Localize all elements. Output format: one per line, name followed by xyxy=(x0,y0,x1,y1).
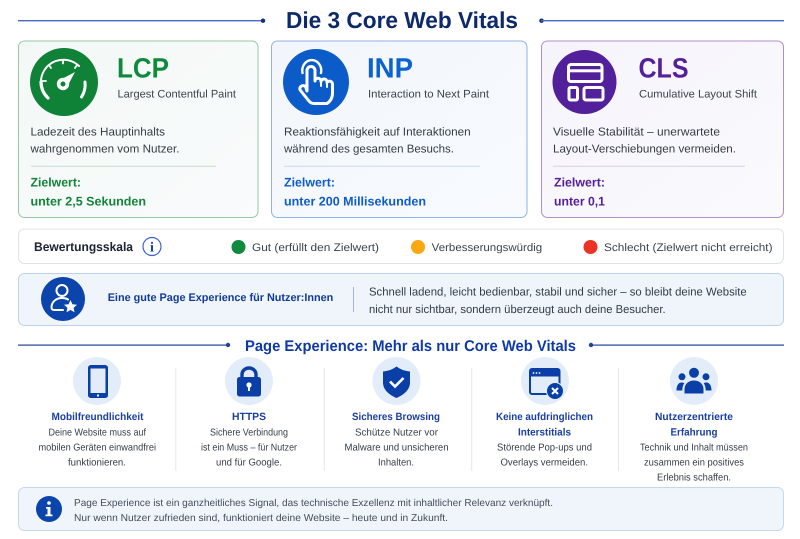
description: während des gesamten Besuchs. xyxy=(283,144,454,156)
target value: unter 0,1 xyxy=(554,194,605,208)
feature text: Schütze Nutzer vor xyxy=(355,428,439,438)
footer text: Page Experience ist ein ganzheitliches Signal, das technische Exzellenz mit inhaltlicher Relevanz verknüpft. xyxy=(74,498,553,509)
metric subtitle: Interaction to Next Paint xyxy=(368,88,489,100)
panel: CLS xyxy=(542,41,784,218)
section heading xyxy=(18,338,784,355)
banner text xyxy=(369,286,747,316)
legend: needs improvement xyxy=(411,240,542,254)
icon: smartphone xyxy=(73,357,121,405)
feature heading: Erfahrung xyxy=(670,426,718,438)
footer text xyxy=(74,498,553,524)
description: Ladezeit des Hauptinhalts xyxy=(30,126,165,138)
panel: page experience banner xyxy=(18,274,784,326)
panel: INP xyxy=(272,41,527,218)
title xyxy=(18,7,784,33)
description xyxy=(29,126,180,156)
footer text: Nur wenn Nutzer zufrieden sind, funktioniert deine Website – heute und in Zukunft. xyxy=(74,513,448,524)
target value xyxy=(284,176,426,208)
feature heading xyxy=(496,411,593,438)
target value xyxy=(30,176,146,208)
metric subtitle: Largest Contentful Paint xyxy=(118,88,236,100)
icon: info xyxy=(143,238,161,256)
banner text: Schnell ladend, leicht bedienbar, stabil und sicher – so bleibt deine Website xyxy=(369,286,747,298)
feature: HTTPS xyxy=(201,357,298,468)
feature text: und für Google. xyxy=(216,458,282,468)
description xyxy=(283,126,471,156)
target value: unter 200 Millisekunden xyxy=(284,194,426,208)
feature text: Deine Website muss auf xyxy=(48,428,146,438)
icon: people xyxy=(670,357,718,405)
feature text: Erlebnis schaffen. xyxy=(657,472,731,484)
feature heading: HTTPS xyxy=(232,411,266,423)
icon: gauge xyxy=(30,48,98,116)
feature heading: Nutzerzentrierte xyxy=(655,411,733,423)
feature text xyxy=(38,428,156,468)
feature heading xyxy=(655,411,733,438)
icon: padlock xyxy=(225,357,273,405)
feature heading: Interstitials xyxy=(518,426,571,438)
metric subtitle: Cumulative Layout Shift xyxy=(639,88,757,100)
icon: info xyxy=(36,496,62,522)
icon: shield xyxy=(372,357,420,405)
target value: Zielwert: xyxy=(30,176,81,190)
target value: Zielwert: xyxy=(284,176,335,190)
metric name: INP: INP xyxy=(367,52,413,84)
target value: Zielwert: xyxy=(554,176,605,190)
title: Die 3 Core Web Vitals xyxy=(286,7,518,33)
feature heading: Keine aufdringlichen xyxy=(496,411,593,423)
feature heading: Sicheres Browsing xyxy=(352,411,440,423)
icon: info: i xyxy=(150,240,154,256)
feature text: ist ein Muss – für Nutzer xyxy=(201,442,298,454)
icon: touch hand xyxy=(283,49,349,115)
banner heading: Eine gute Page Experience für Nutzer:Innen xyxy=(108,292,334,304)
description xyxy=(553,126,736,156)
feature text xyxy=(640,442,748,484)
panel: footer note xyxy=(18,488,784,530)
description: Visuelle Stabilität – unerwartete xyxy=(553,126,720,138)
description: wahrgenommen vom Nutzer. xyxy=(29,144,180,156)
feature text: Sichere Verbindung xyxy=(210,428,288,438)
legend: good: Gut (erfüllt den Zielwert) xyxy=(252,242,379,254)
section heading: Page Experience: Mehr als nur Core Web Vitals xyxy=(245,338,576,355)
feature text: funktionieren. xyxy=(68,458,126,468)
feature text: Overlays vermeiden. xyxy=(500,458,588,468)
feature text xyxy=(497,442,592,468)
feature heading: Mobilfreundlichkeit xyxy=(52,411,144,423)
feature: mobile friendliness xyxy=(38,357,156,468)
feature: user-centred experience xyxy=(640,357,748,484)
feature: safe browsing xyxy=(344,357,448,468)
panel: LCP xyxy=(18,41,258,218)
icon: browser popup xyxy=(521,357,569,405)
panel: rating scale xyxy=(18,229,784,264)
feature text xyxy=(201,428,298,468)
feature text: Technik und Inhalt müssen xyxy=(640,442,748,454)
feature text: Inhalten. xyxy=(378,458,414,468)
scale heading: Bewertungsskala xyxy=(34,240,134,254)
feature text xyxy=(344,428,448,468)
banner text: nicht nur sichtbar, sondern überzeugt auch deine Besucher. xyxy=(369,304,666,316)
legend: needs improvement: Verbesserungswürdig xyxy=(432,242,542,254)
feature text: zusammen ein positives xyxy=(644,458,744,468)
metric name: LCP: LCP xyxy=(117,52,169,84)
metric name: CLS: CLS xyxy=(638,52,688,84)
feature: no intrusive interstitials xyxy=(496,357,593,468)
target value: unter 2,5 Sekunden xyxy=(30,194,146,208)
description: Reaktionsfähigkeit auf Interaktionen xyxy=(284,126,471,138)
description: Layout-Verschiebungen vermeiden. xyxy=(553,144,736,156)
feature text: mobilen Geräten einwandfrei xyxy=(38,442,156,454)
icon: layout xyxy=(552,50,616,114)
feature text: Störende Pop-ups und xyxy=(497,442,592,454)
feature text: Malware und unsicheren xyxy=(344,442,448,454)
icon: user with star xyxy=(41,277,85,321)
target value xyxy=(554,176,605,208)
legend: poor: Schlecht (Zielwert nicht erreicht) xyxy=(604,242,772,254)
legend: good xyxy=(232,240,379,254)
